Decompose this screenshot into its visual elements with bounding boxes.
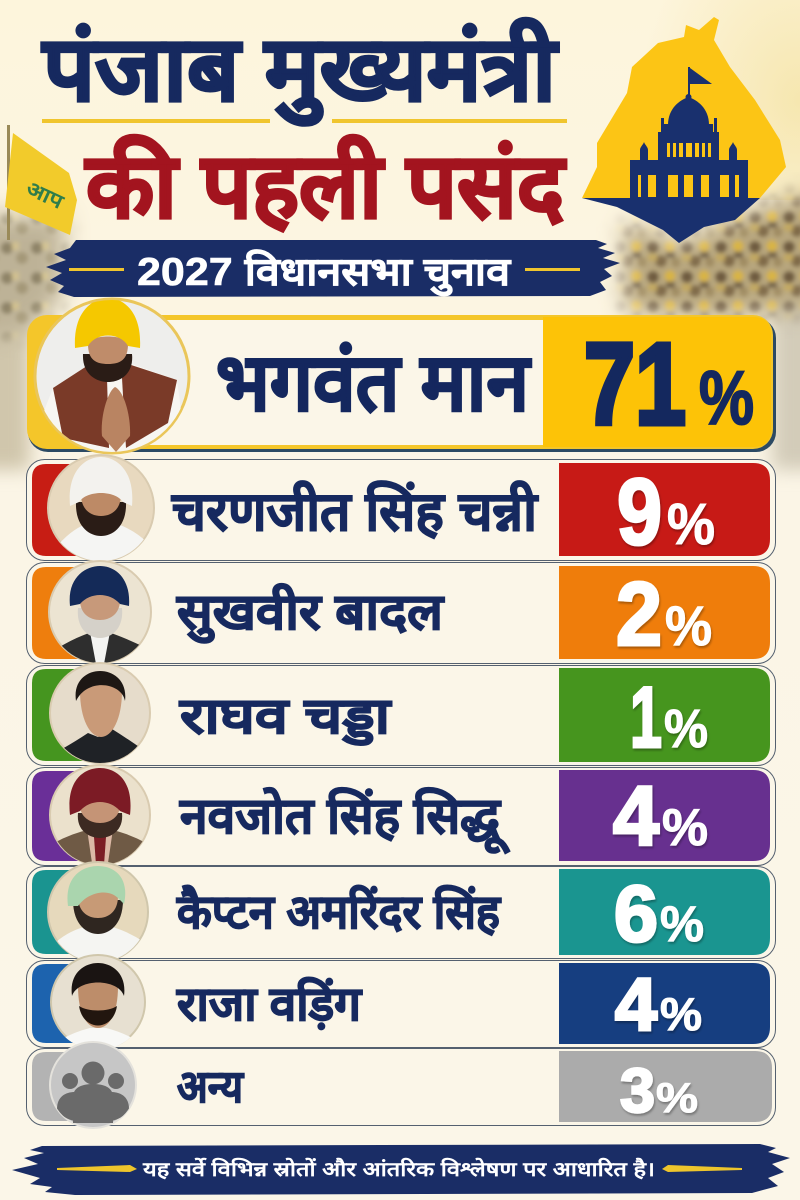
value: 2: [616, 565, 662, 665]
portrait: Channi: [48, 455, 154, 568]
name: कैप्टन अमरिंदर सिंह: [176, 885, 502, 938]
portrait: Raghav Chadha: [50, 663, 150, 773]
portrait: Navjot Sidhu: [50, 765, 150, 875]
value: %: [656, 1074, 698, 1121]
value: %: [699, 356, 754, 441]
value: 1: [630, 670, 662, 766]
value: [615, 963, 702, 1046]
value: 71: [584, 319, 686, 449]
icon: people group: [50, 1042, 136, 1128]
gurdwara: [630, 67, 748, 198]
map: yellow: [582, 17, 786, 198]
value: %: [660, 988, 702, 1040]
value: %: [664, 699, 708, 759]
value: [630, 670, 708, 766]
value: %: [662, 799, 708, 857]
value: %: [660, 896, 704, 952]
row: Raghav Chadha 1%: [26, 663, 776, 773]
row: Navjot Sidhu 4%: [26, 765, 776, 875]
crowd photo: left: [0, 200, 80, 344]
icon: AAP flag: [5, 125, 77, 240]
value: 4: [613, 769, 659, 863]
name: राघव चड्डा: [179, 688, 392, 746]
footer banner: यह सर्वे विभिन्न स्रोतों और आंतरिक विश्लेषण पर आधारित है।: [142, 1157, 655, 1181]
name: सुखवीर बादल: [176, 583, 445, 644]
row: Raja Warring 4%: [26, 954, 776, 1048]
icon: AAP flag: आप: [23, 178, 68, 214]
gurdwara arches: [638, 143, 739, 197]
value: [614, 869, 704, 958]
row: Captain Amarinder Singh 6%: [26, 861, 776, 959]
row: Sukhbir Badal 2%: [26, 561, 776, 672]
title divider: [42, 119, 567, 123]
title line 1: पंजाब मुख्यमंत्री: [41, 17, 559, 126]
value: [620, 1057, 698, 1126]
panel: Bhagwant Mann 71%: [27, 298, 776, 456]
row: Channi 9%: [26, 455, 776, 568]
banner: 2027 election: 2027 विधानसभा चुनाव: [137, 249, 511, 297]
value: %: [665, 594, 712, 657]
name: भगवंत मान: [216, 338, 531, 427]
title line 2: की पहली पसंद: [84, 134, 567, 237]
banner: 2027 election: [46, 240, 620, 297]
value: 6: [614, 869, 658, 958]
value: 3: [620, 1057, 655, 1126]
crowd haze: left margin: [0, 290, 30, 470]
value: 4: [615, 963, 657, 1046]
value: [613, 769, 708, 863]
portrait: Raja Warring: [50, 954, 146, 1047]
name: अन्य: [177, 1061, 245, 1112]
value: [617, 459, 715, 564]
map: blue base: [582, 198, 760, 243]
row: Others 3%: [26, 1042, 776, 1128]
portrait: Captain Amarinder Singh: [48, 862, 148, 972]
name: नवजोत सिंह सिद्धू: [179, 787, 510, 854]
crowd haze: right margin: [772, 290, 800, 470]
icon: Punjab map with gurdwara: [582, 17, 786, 243]
name: राजा वड़िंग: [176, 977, 363, 1030]
portrait: Sukhbir Badal: [49, 561, 151, 672]
value: [616, 565, 712, 665]
footer banner: [12, 1144, 790, 1195]
faded banners top right: [640, 0, 800, 200]
value: 9: [617, 459, 662, 564]
crowd photo: right: [608, 182, 800, 327]
portrait: Bhagwant Mann: [35, 298, 189, 456]
value: %: [667, 492, 715, 557]
name: चरणजीत सिंह चन्नी: [171, 480, 539, 542]
